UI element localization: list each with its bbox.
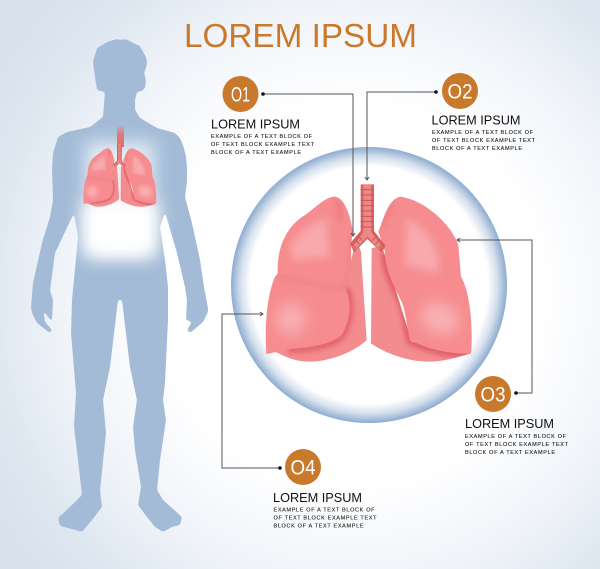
text block 03: BLOCK OF A TEXT EXAMPLE <box>465 450 555 456</box>
human body silhouette <box>31 39 208 532</box>
badge 02 <box>442 73 478 109</box>
text block 01 <box>211 118 315 156</box>
text block 03 <box>465 417 569 456</box>
badge 01 <box>222 76 258 112</box>
text block 02: EXAMPLE OF A TEXT BLOCK OF <box>432 130 534 136</box>
text block 03: OF TEXT BLOCK EXAMPLE TEXT <box>465 442 569 448</box>
connector 04 <box>222 312 282 470</box>
connector 03 <box>457 238 532 395</box>
text block 02: LOREM IPSUM <box>432 114 520 128</box>
badge 03 <box>475 376 511 412</box>
text block 04 <box>273 491 377 530</box>
text block 04: LOREM IPSUM <box>273 491 362 505</box>
badge 04 <box>285 449 321 485</box>
badge 04: O4 <box>290 456 316 480</box>
text block 02 <box>432 114 536 152</box>
title: LOREM IPSUM <box>184 18 417 55</box>
badge 03: O3 <box>480 384 506 406</box>
text block 01: LOREM IPSUM <box>211 118 300 132</box>
small trachea <box>117 125 124 147</box>
text block 04: OF TEXT BLOCK EXAMPLE TEXT <box>274 516 377 522</box>
text block 04: EXAMPLE OF A TEXT BLOCK OF <box>274 508 375 514</box>
text block 03: EXAMPLE OF A TEXT BLOCK OF <box>465 434 567 440</box>
torso glow <box>86 142 154 255</box>
text block 03: LOREM IPSUM <box>465 417 554 431</box>
text block 01: OF TEXT BLOCK EXAMPLE TEXT <box>211 142 315 148</box>
small lungs <box>83 144 156 207</box>
badge 01: O1 <box>231 84 250 106</box>
text block 02: OF TEXT BLOCK EXAMPLE TEXT <box>432 138 536 144</box>
text block 02: BLOCK OF A TEXT EXAMPLE <box>432 146 522 152</box>
large lungs <box>266 184 472 362</box>
badge 02: O2 <box>448 80 472 104</box>
connector 02 <box>365 90 438 180</box>
text block 01: BLOCK OF A TEXT EXAMPLE <box>211 150 301 156</box>
connector 01 <box>261 92 355 236</box>
text block 01: EXAMPLE OF A TEXT BLOCK OF <box>211 134 313 140</box>
large circle with lungs <box>231 147 507 423</box>
text block 04: BLOCK OF A TEXT EXAMPLE <box>274 524 364 530</box>
